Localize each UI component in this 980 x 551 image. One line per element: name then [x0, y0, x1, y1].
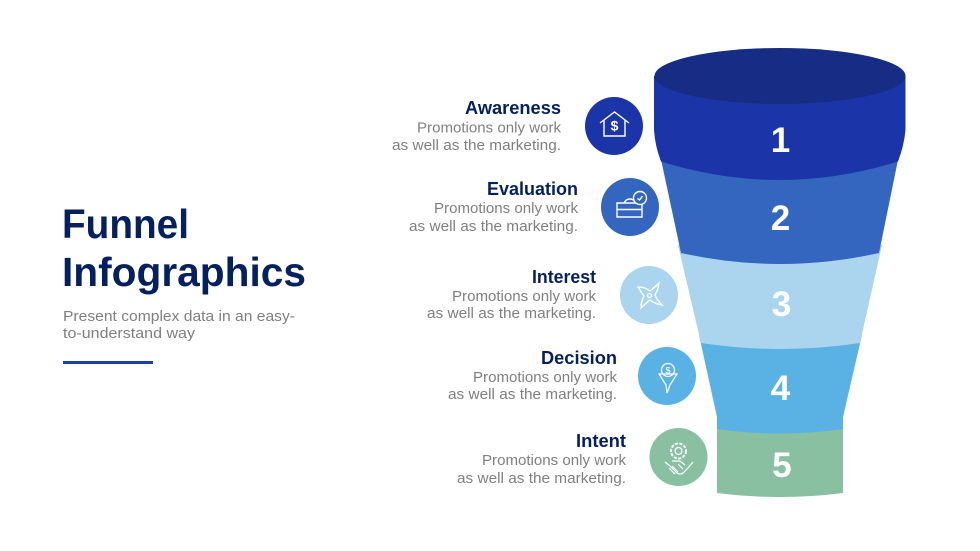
heading: Decision: Decision — [541, 348, 617, 368]
description: Intent — [457, 452, 626, 487]
item: Awareness — [392, 97, 643, 155]
description: Decision: as well as the marketing. — [448, 386, 617, 403]
funnel band 2 — [659, 150, 900, 264]
heading: Evaluation: Evaluation — [487, 179, 578, 199]
heading: Interest: Interest — [532, 267, 596, 287]
icon circle: cake with clock — [601, 178, 659, 236]
funnel numbers: 5 — [772, 446, 792, 485]
description: Intent: as well as the marketing. — [457, 470, 626, 487]
funnel band 3 — [678, 245, 882, 349]
icon circle: funnel with coin — [638, 347, 696, 405]
heading: Intent: Intent — [576, 431, 626, 451]
description: Decision: Promotions only work — [473, 369, 617, 386]
icon circle: house with dollar — [585, 97, 643, 155]
heading: Awareness: Awareness — [465, 98, 561, 118]
funnel top opening — [654, 48, 906, 104]
item: Evaluation — [409, 178, 659, 236]
subtitle: Present complex data in an easy- — [63, 308, 295, 325]
funnel numbers: 1 — [771, 121, 790, 160]
description: Interest — [427, 288, 596, 322]
item: Intent — [457, 428, 708, 487]
description: Intent: Promotions only work — [482, 452, 626, 469]
funnel numbers: 2 — [771, 199, 790, 238]
description: Evaluation: as well as the marketing. — [409, 218, 578, 235]
description: Interest: as well as the marketing. — [427, 305, 596, 322]
title: Funnel — [62, 201, 189, 247]
funnel numbers: 3 — [772, 285, 791, 324]
icon circle: gear and handshake — [650, 428, 708, 486]
funnel numbers: 4 — [771, 369, 791, 408]
description: Evaluation: Promotions only work — [434, 200, 578, 217]
funnel band 1 — [654, 76, 906, 180]
title underline — [63, 361, 153, 364]
funnel numbers — [771, 121, 792, 485]
description: Decision — [448, 369, 617, 403]
funnel band 4 — [699, 335, 862, 434]
funnel chart — [654, 48, 906, 497]
subtitle: to-understand way — [63, 325, 196, 342]
description: Awareness: Promotions only work — [417, 120, 561, 136]
icon circle: throwing star — [620, 266, 678, 324]
title: Infographics — [62, 249, 306, 295]
item: Decision — [448, 347, 696, 405]
title — [62, 201, 306, 295]
description: Interest: Promotions only work — [452, 288, 596, 305]
item: Interest — [427, 266, 678, 324]
description: Evaluation — [409, 200, 578, 235]
icon circle: funnel with coin: $ — [665, 366, 671, 376]
subtitle — [63, 308, 295, 342]
funnel band 5 — [717, 425, 843, 497]
description: Awareness — [392, 120, 561, 154]
icon circle: house with dollar: $ — [611, 118, 619, 134]
description: Awareness: as well as the marketing. — [392, 137, 561, 154]
